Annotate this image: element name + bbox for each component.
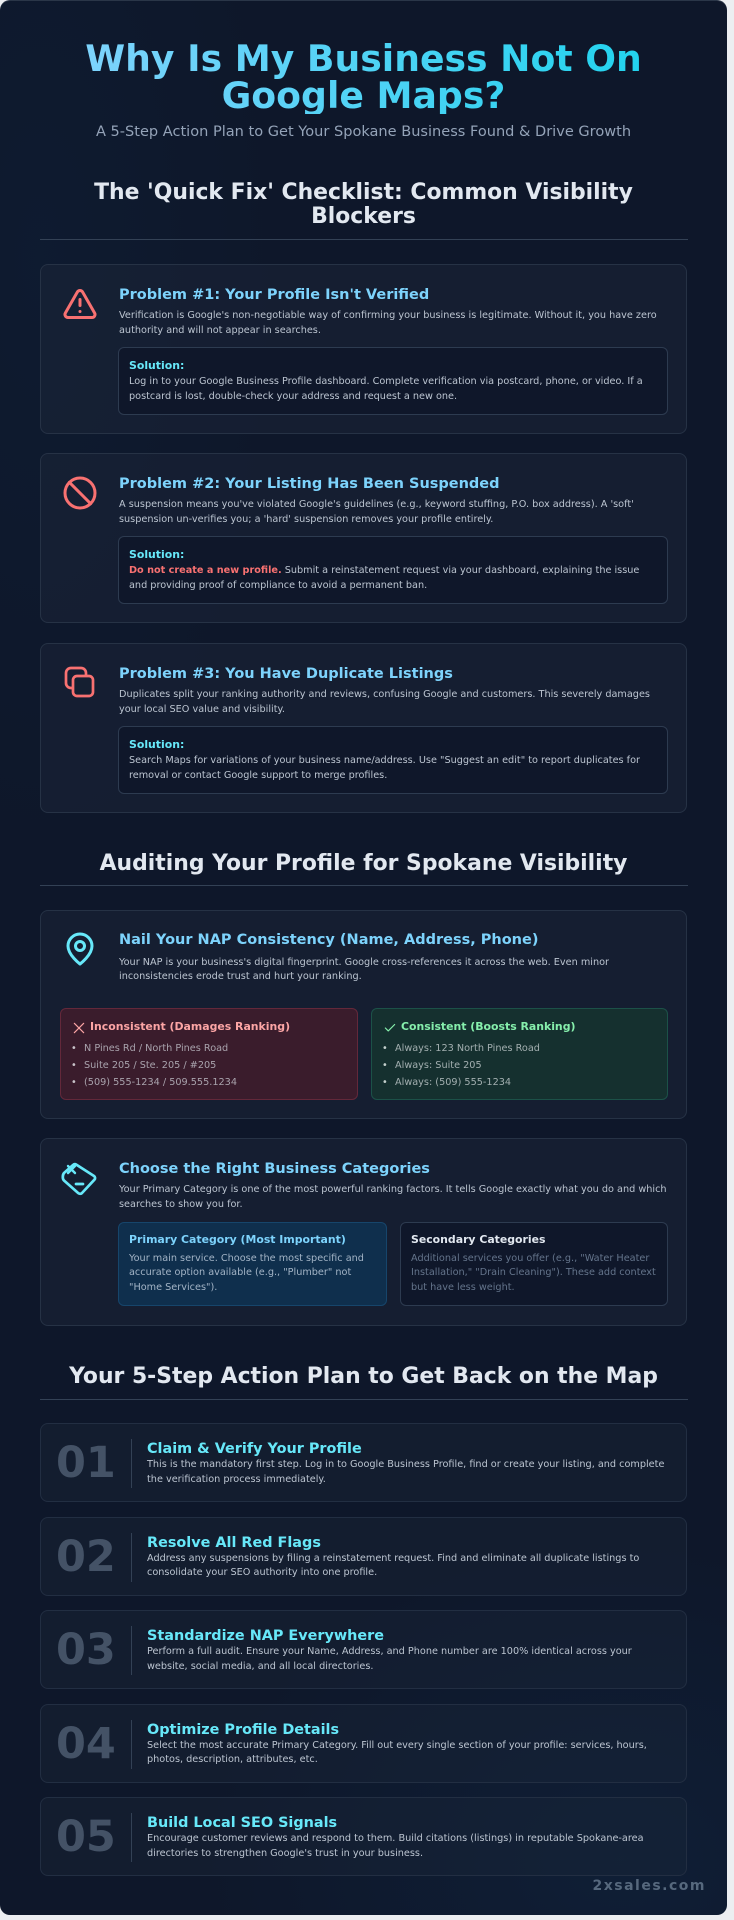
solution text: Do not create a new profile. Submit a reinstatement request via your dashboard, explaining the issue [129,565,639,576]
solution label: Solution: [129,359,184,372]
problem 1 description [119,310,657,336]
solution text: postcard is lost, double-check your address and request a new one. [129,391,457,402]
step 4 [40,1704,687,1782]
step title: Resolve All Red Flags [147,1534,321,1550]
primary text: accurate option available (e.g., "Plumber" not [129,1267,351,1278]
consistent heading: Consistent (Boosts Ranking) [401,1020,575,1033]
watermark: 2xsales.com [592,1878,706,1894]
step text: website, social media, and all local directories. [147,1661,373,1672]
title: Why Is My Business Not On [85,37,642,80]
step title: Build Local SEO Signals [147,1815,337,1831]
step text [147,1646,632,1672]
solution text: Search Maps for variations of your business name/address. Use "Suggest an edit" to report duplicates for [129,755,640,766]
icon: check [384,1024,396,1032]
step 2 [40,1516,687,1596]
number: 04 [56,1718,116,1768]
consistent list: Always: Suite 205 [395,1060,482,1070]
step title: Optimize Profile Details [147,1722,339,1738]
step text [146,1459,664,1485]
solution box 2 [118,536,668,604]
icon: warning triangle [63,289,96,319]
NAP heading: Nail Your NAP Consistency (Name, Address, Phone) [119,932,538,948]
inconsistent heading: Inconsistent (Damages Ranking) [90,1020,290,1033]
solution text [129,565,639,591]
problem 2 description [119,499,634,525]
step 5 [40,1797,687,1876]
categories description: Your Primary Category is one of the most powerful ranking factors. It tells Google exactly what you do and which [119,1184,667,1195]
panel: problem 3 [40,643,687,813]
inconsistent list [71,1042,237,1088]
title [85,37,642,117]
problem 2 heading: Problem #2: Your Listing Has Been Suspended [119,476,500,492]
step text [147,1553,639,1578]
inconsistent list: N Pines Rd / North Pines Road [84,1042,228,1054]
icon: ban [64,476,96,510]
step 1 [40,1423,687,1502]
inconsistent list: (509) 555-1234 / 509.555.1234 [84,1076,237,1088]
problem 3 heading: Problem #3: You Have Duplicate Listings [119,666,453,682]
step text: the verification process immediately. [147,1474,326,1485]
consistent list: Always: (509) 555-1234 [395,1076,511,1088]
problem 3 description [119,689,650,715]
solution text [129,376,643,402]
problem 2 description: A suspension means you've violated Google's guidelines (e.g., keyword stuffing, P.O. box address). A 'soft' [119,499,634,510]
categories heading: Choose the Right Business Categories [119,1161,430,1177]
title: Google Maps? [222,74,505,117]
heading: quick fix checklist: Blockers [311,204,416,229]
primary text [129,1253,364,1293]
solution text [129,755,640,781]
solution label: Solution: [129,738,184,751]
heading: auditing: Auditing Your Profile for Spokane Visibility [100,850,627,876]
solution box 1 [118,347,668,415]
step title: Standardize NAP Everywhere [147,1628,384,1644]
NAP description: Your NAP is your business's digital fingerprint. Google cross-references it across the web. Even minor [119,956,609,968]
icon: copy [64,666,94,698]
problem 1 heading: Problem #1: Your Profile Isn't Verified [119,286,429,302]
primary heading: Primary Category (Most Important) [129,1232,346,1246]
number: 01 [56,1438,116,1488]
panel: business categories [40,1138,687,1326]
categories description: searches to show you for. [119,1199,243,1210]
subtitle: A 5-Step Action Plan to Get Your Spokane Business Found & Drive Growth [96,123,631,140]
step text: Select the most accurate Primary Category. Fill out every single section of your profile: services, hours, [147,1740,647,1751]
inconsistent list: • [71,1060,77,1070]
step text: consolidate your SEO authority into one profile. [147,1567,377,1578]
step 3 [40,1610,687,1689]
NAP description [119,956,609,982]
step text: Encourage customer reviews and respond to them. Build citations (listings) in reputable Spokane-area [147,1833,644,1844]
step text: Address any suspensions by filing a reinstatement request. Find and eliminate all duplicate listings to [147,1553,639,1564]
primary text: Your main service. Choose the most specific and [129,1253,364,1264]
heading: quick fix checklist [94,180,633,229]
solution label: Solution: [129,548,184,561]
consistent list: • [382,1042,388,1054]
inconsistent list: Suite 205 / Ste. 205 / #205 [84,1060,216,1070]
number: 02 [56,1532,116,1582]
solution box 3 [118,726,668,794]
problem 1 description: authority and will not appear in searches. [119,325,321,336]
consistent list: • [382,1060,388,1070]
problem 1 description: Verification is Google's non-negotiable way of confirming your business is legitimate. Without it, you have zero [119,310,657,321]
categories description [119,1184,667,1210]
icon: x [74,1022,84,1034]
consistent list [382,1042,540,1088]
box: inconsistent [60,1008,358,1100]
NAP description: inconsistencies erode trust and hurt your ranking. [119,971,362,982]
box: secondary categories [400,1222,668,1306]
box: consistent [371,1008,668,1100]
step text: photos, description, attributes, etc. [147,1754,318,1765]
step text: Perform a full audit. Ensure your Name, Address, and Phone number are 100% identical across your [147,1646,632,1657]
problem 3 description: Duplicates split your ranking authority and reviews, confusing Google and customers. This severely damages [119,689,650,700]
step text [147,1740,647,1765]
consistent list: • [382,1076,388,1088]
solution text: and providing proof of compliance to avoid a permanent ban. [129,580,427,591]
step title: Claim & Verify Your Profile [147,1441,362,1457]
secondary text [411,1253,656,1293]
problem 2 description: suspension un-verifies you; a 'hard' suspension removes your profile entirely. [119,514,493,525]
icon: tag [61,1162,96,1196]
number: 05 [56,1812,116,1862]
step text [147,1833,644,1859]
primary text: "Home Services"). [129,1282,217,1293]
icon: map pin [66,932,94,966]
heading: action plan: Your 5-Step Action Plan to Get Back on the Map [69,1364,658,1388]
box: primary category [118,1222,387,1306]
panel: NAP consistency [40,910,687,1119]
solution text: removal or contact Google support to merge profiles. [129,770,387,781]
secondary heading: Secondary Categories [411,1232,546,1246]
step text: directories to strengthen Google's trust in your business. [147,1848,423,1859]
heading: quick fix checklist: The 'Quick Fix' Checklist: Common Visibility [94,180,633,205]
panel: problem 1 [40,264,687,434]
inconsistent list: • [71,1076,77,1088]
secondary text: but have less weight. [411,1282,515,1293]
secondary text: Additional services you offer (e.g., "Water Heater [411,1253,649,1264]
solution text: Log in to your Google Business Profile dashboard. Complete verification via postcard, phone, or video. If a [129,376,643,387]
number: 03 [56,1625,116,1675]
consistent list: Always: 123 North Pines Road [395,1042,540,1054]
step text: This is the mandatory first step. Log in to Google Business Profile, find or create your listing, and complete [147,1459,664,1470]
secondary text: Installation," "Drain Cleaning"). These add context [411,1267,656,1278]
inconsistent list: • [71,1042,77,1054]
problem 3 description: your local SEO value and visibility. [119,704,285,715]
panel: problem 2 [40,453,687,623]
